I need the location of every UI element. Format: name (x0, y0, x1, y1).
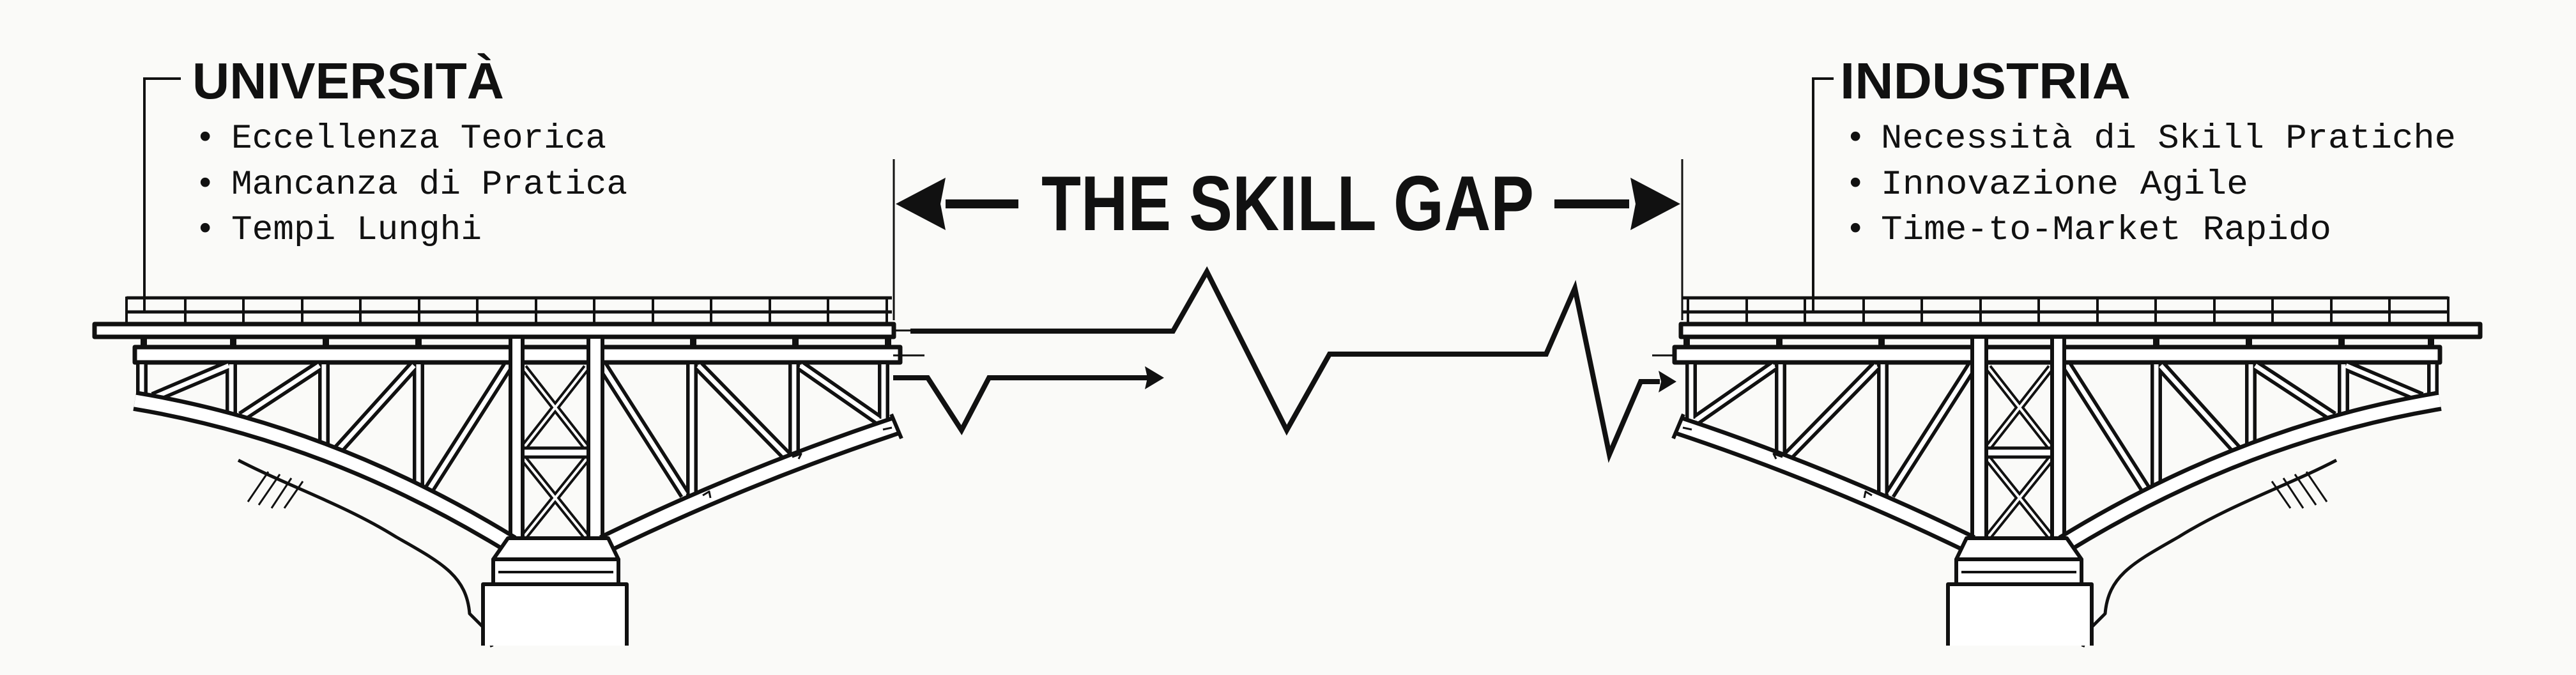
text block: industria bullets (1845, 120, 2456, 250)
text block: industria bullets: • (1845, 166, 1866, 205)
text block: università bullets: • (195, 211, 215, 250)
bridge: università (left) (95, 297, 910, 647)
text block: università bullets: Mancanza di Pratica (231, 166, 627, 205)
dimension: the skill gap (894, 159, 1682, 320)
panel: università (144, 52, 627, 312)
text block: industria bullets: Necessità di Skill Pratiche (1881, 120, 2456, 159)
bracket line right (1813, 79, 1834, 312)
text block: industria bullets: • (1845, 120, 1866, 159)
text block: università bullets: • (195, 166, 215, 205)
text block: università bullets: Eccellenza Teorica (231, 120, 606, 159)
text block: università bullets (195, 120, 627, 250)
arrowheads on zigzag (1145, 366, 1676, 392)
bracket line left (144, 79, 181, 312)
text block: industria bullets: • (1845, 211, 1866, 250)
heading: università: UNIVERSITÀ (192, 52, 504, 109)
text block: industria bullets: Time-to-Market Rapido (1881, 211, 2331, 250)
text block: università bullets: • (195, 120, 215, 159)
bridge: industria (right) (1673, 297, 2480, 647)
zigzag: broken connection lines (893, 272, 1675, 454)
arrow: left (896, 178, 1018, 230)
panel: industria (1813, 52, 2456, 312)
arrow: right (1554, 178, 1680, 230)
text block: industria bullets: Innovazione Agile (1881, 166, 2248, 205)
text block: università bullets: Tempi Lunghi (231, 211, 482, 250)
heading: industria: INDUSTRIA (1840, 52, 2131, 109)
title: the skill gap: THE SKILL GAP (1041, 160, 1534, 247)
